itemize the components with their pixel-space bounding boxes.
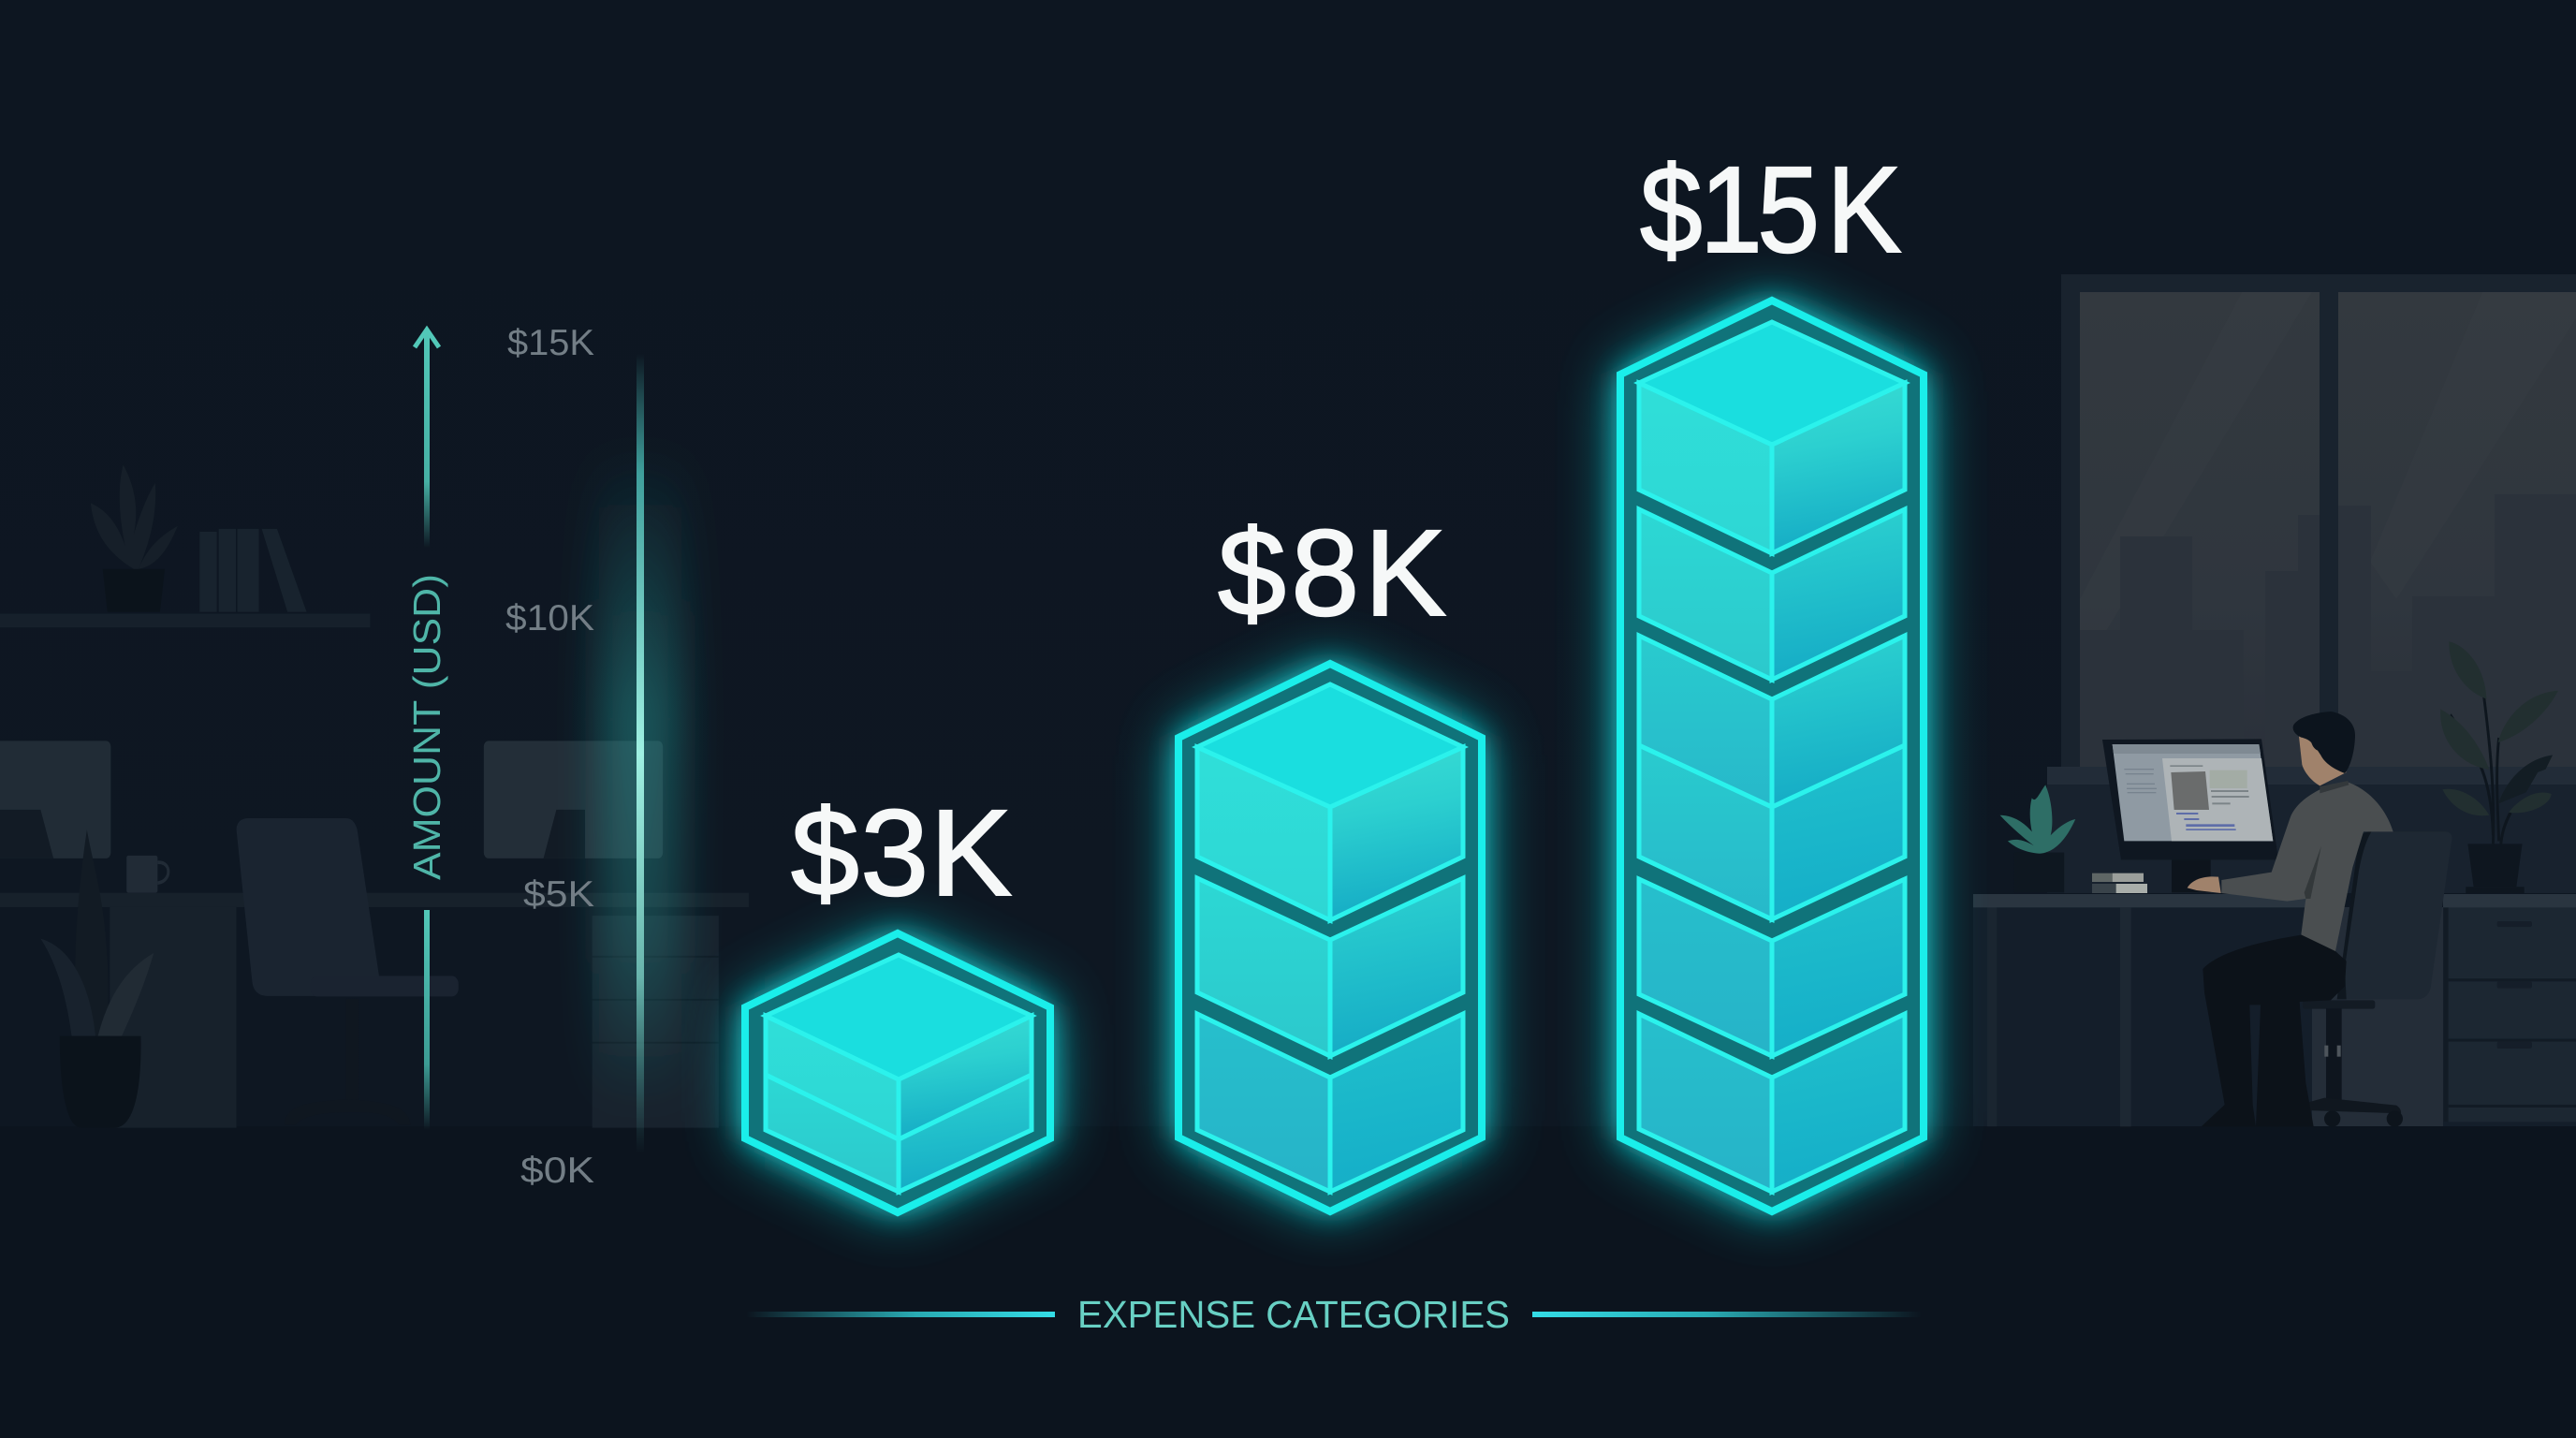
label: $15K: $15K	[1640, 140, 1901, 278]
axis title: AMOUNT (USD)	[405, 574, 448, 880]
window panes with skyline	[2080, 292, 2576, 767]
shelf plant	[91, 464, 178, 612]
desk top	[0, 893, 749, 907]
stacked books	[2092, 873, 2147, 893]
hair	[2293, 712, 2355, 773]
stacked blocks	[766, 955, 1032, 1192]
x-axis title: EXPENSE CATEGORIES	[1077, 1293, 1510, 1336]
left office chair	[237, 818, 459, 1125]
monitor	[2102, 739, 2278, 892]
desk tops	[1973, 894, 2576, 907]
shelf books	[199, 529, 307, 612]
y-axis tick labels: $0K	[520, 1151, 594, 1191]
drawer cabinet	[2444, 907, 2576, 1122]
bar: $8K	[1178, 664, 1482, 1211]
background office scene: worker at desk	[1973, 712, 2576, 1127]
desk side panel	[110, 907, 237, 1128]
x-axis label with lines	[746, 1293, 1922, 1336]
back wall below window	[2047, 767, 2576, 893]
y-axis tick labels: $10K	[505, 598, 594, 638]
label: $3K: $3K	[791, 784, 1012, 921]
outer hexagon	[745, 933, 1050, 1212]
glow	[1178, 664, 1482, 1211]
face and neck	[2299, 733, 2347, 785]
trousers	[2202, 934, 2347, 1126]
chair	[2300, 831, 2452, 1127]
floor plant	[40, 829, 154, 1128]
stacked blocks	[1197, 684, 1463, 1192]
desk leg	[2120, 907, 2131, 1126]
window sill	[2047, 767, 2576, 785]
y-axis tick labels	[505, 323, 594, 1191]
shelf	[0, 613, 370, 627]
background office scene: plants and cabinet	[1987, 641, 2576, 1126]
small plant	[2000, 785, 2075, 892]
under-desk panel	[1973, 907, 2576, 1126]
outer hexagon	[1620, 301, 1924, 1211]
bar: $3K	[745, 933, 1050, 1212]
outer hexagon	[1178, 664, 1482, 1211]
axis line lower	[424, 910, 430, 1130]
background wall	[0, 0, 2576, 1126]
drawer unit	[593, 916, 719, 1128]
glow	[1620, 301, 1924, 1211]
y-axis arrow with title	[405, 330, 448, 1130]
y-axis glow line	[599, 354, 681, 1153]
stacked blocks	[1639, 322, 1905, 1192]
collar	[2320, 781, 2349, 793]
arm shadow	[2305, 845, 2321, 899]
glow	[745, 933, 1050, 1212]
right monitor	[484, 741, 663, 858]
hand	[2188, 876, 2221, 893]
label: $8K: $8K	[1218, 504, 1446, 641]
axis line upper with arrowhead	[415, 330, 439, 548]
floor	[0, 1126, 2576, 1438]
bar: $15K	[1620, 301, 1924, 1211]
large plant	[2440, 641, 2558, 893]
background office scene: left desk	[0, 464, 749, 1128]
mug	[126, 856, 168, 893]
background office scene: window	[1973, 274, 2576, 1126]
desk leg	[1987, 907, 1997, 1126]
man	[2188, 712, 2393, 1126]
y-axis tick labels: $15K	[507, 323, 594, 363]
lit wall behind chair	[2312, 907, 2443, 1126]
left monitor	[0, 741, 110, 858]
sweater	[2221, 782, 2393, 951]
y-axis tick labels: $5K	[523, 874, 594, 915]
window frame	[2061, 274, 2576, 785]
